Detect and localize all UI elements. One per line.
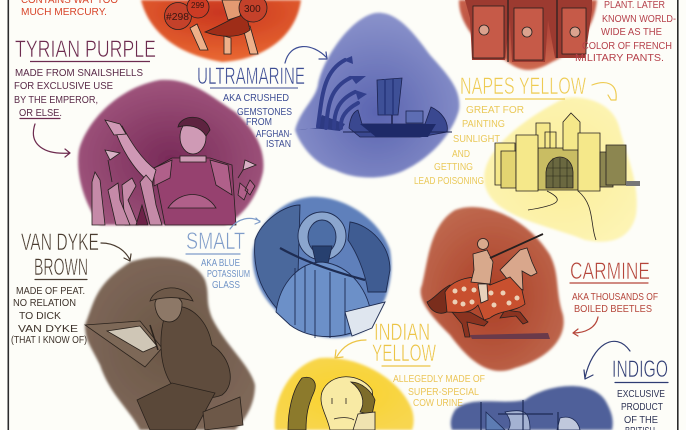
watercolor blob: indigo (451, 386, 613, 430)
caption: ultramarine: ISTAN (266, 139, 291, 150)
caption: napes yellow: PAINTING (462, 119, 505, 130)
caption: smalt: AKA BLUE (201, 258, 240, 269)
title: indian yellow: YELLOW (372, 340, 436, 367)
illustration: soldiers with numbered shields: 300 (244, 4, 261, 15)
caption: indian yellow: ALLEGEDLY MADE OF (393, 374, 485, 385)
caption: napes yellow: GETTING (434, 162, 473, 173)
caption: tyrian purple: BY THE EMPEROR, (14, 95, 98, 106)
illustration: shakespeare (288, 377, 375, 430)
title: van dyke brown (21, 229, 99, 281)
caption: vermilion (21, 0, 118, 18)
caption: ultramarine: FROM (246, 117, 272, 128)
caption: indigo: EXCLUSIVE (617, 389, 665, 400)
caption: vermilion: MUCH MERCURY. (21, 7, 107, 18)
caption: madder: COLOR OF FRENCH (582, 41, 672, 52)
panel: indian yellow (275, 319, 485, 430)
caption: smalt: POTASSIUM (207, 269, 250, 280)
caption: van dyke brown: (THAT I KNOW OF) (11, 335, 87, 346)
caption: carmine: BOILED BEETLES (574, 304, 652, 315)
watercolor blob: madder (459, 0, 597, 70)
caption: tyrian purple: MADE FROM SNAILSHELLS (15, 68, 143, 79)
caption: smalt: GLASS (212, 280, 240, 291)
title: van dyke brown: VAN DYKE (21, 229, 99, 256)
caption: indigo: PRODUCT (621, 402, 663, 413)
watercolor blob: ultramarine (295, 13, 459, 178)
illustration: castle (495, 113, 640, 240)
caption: indian yellow (393, 374, 485, 409)
watercolor blob: napes yellow (484, 97, 637, 242)
panel: smalt (186, 197, 391, 338)
caption: indigo: OF THE (624, 415, 658, 426)
illustration: scribe at desk (85, 288, 243, 430)
arrow: ultramarine (285, 47, 327, 63)
underline (465, 98, 565, 100)
caption: napes yellow: GREAT FOR (466, 105, 524, 116)
underline (210, 87, 298, 89)
caption: napes yellow: LEAD POISONING (414, 176, 484, 187)
watercolor blob: smalt (253, 197, 391, 338)
illustration: sailing ship (481, 400, 580, 430)
title: indian yellow: INDIAN (374, 319, 430, 346)
caption: napes yellow: AND (452, 149, 470, 160)
arrow: napes yellow (592, 83, 616, 100)
panel: vermilion (21, 0, 301, 62)
caption: smalt (201, 258, 250, 291)
illustration: sea serpents and ship (298, 56, 452, 137)
illustration: stained glass saint (255, 205, 390, 338)
caption: napes yellow: SUNLIGHT (453, 134, 500, 145)
underline and arrow (335, 340, 430, 366)
watercolor blob: brown (85, 257, 255, 430)
caption: madder: MILITARY PANTS. (575, 53, 664, 64)
watercolor blob: vermilion (141, 0, 301, 62)
caption: van dyke brown (11, 286, 87, 346)
panel: tyrian purple (14, 36, 263, 225)
title: napes yellow: NAPES YELLOW (460, 73, 586, 100)
caption: ultramarine (223, 93, 292, 150)
caption: tyrian purple (14, 68, 143, 119)
watercolor blob: purple (78, 80, 263, 225)
caption: indian yellow: SUPER-SPECIAL (408, 387, 479, 398)
caption: indigo (617, 389, 665, 430)
caption: napes yellow (414, 105, 524, 187)
caption: madder: WIDE AS THE (601, 27, 662, 38)
caption: tyrian purple: FOR EXCLUSIVE USE (14, 81, 113, 92)
caption: madder (575, 0, 676, 64)
title: ultramarine: ULTRAMARINE (197, 63, 305, 90)
title: tyrian purple: TYRIAN PURPLE (15, 36, 156, 63)
illustration: soldiers holding signs (465, 0, 592, 62)
caption: van dyke brown: NO RELATION (13, 298, 76, 309)
illustration: soldiers with numbered shields: 299 (191, 1, 205, 10)
caption: indian yellow: COW URINE (413, 398, 463, 409)
caption: ultramarine: AFGHAN- (256, 129, 292, 140)
panel: napes yellow (414, 73, 640, 242)
panel: ultramarine (197, 13, 459, 178)
title: carmine: CARMINE (570, 258, 650, 285)
title: indian yellow (372, 319, 436, 367)
title: van dyke brown: BROWN (34, 254, 88, 281)
underline and arrow (186, 218, 260, 254)
caption: carmine: AKA THOUSANDS OF (572, 292, 658, 303)
watercolor blob: indian yellow (275, 358, 414, 430)
caption: van dyke brown: TO DICK (19, 311, 61, 322)
illustration: soldiers with numbered shields (164, 0, 267, 54)
underline (30, 60, 150, 62)
panel: van dyke brown (11, 229, 255, 430)
caption: van dyke brown: VAN DYKE (18, 324, 78, 335)
title: smalt: SMALT (186, 228, 245, 255)
illustration: soldiers with numbered shields: #298 (166, 12, 189, 23)
illustration: emperor and crowd (92, 117, 256, 225)
arrow: purple (20, 118, 70, 157)
caption: madder: KNOWN WORLD- (602, 14, 676, 25)
underline and arrow (584, 341, 668, 382)
caption: van dyke brown: MADE OF PEAT. (16, 286, 85, 297)
illustration: knight on horse (427, 234, 550, 339)
underline and arrow (35, 243, 131, 280)
caption: tyrian purple: OR ELSE. (19, 108, 62, 119)
panel: madder red (459, 0, 676, 70)
panel: carmine (421, 207, 658, 371)
panel: indigo (451, 341, 668, 430)
watercolor blob: carmine (421, 207, 564, 371)
caption: ultramarine: AKA CRUSHED (223, 93, 289, 104)
caption: ultramarine: GEMSTONES (237, 107, 292, 118)
underline and arrow (570, 283, 648, 336)
caption: madder: PLANT. LATER (604, 0, 665, 11)
caption: carmine (572, 292, 658, 315)
